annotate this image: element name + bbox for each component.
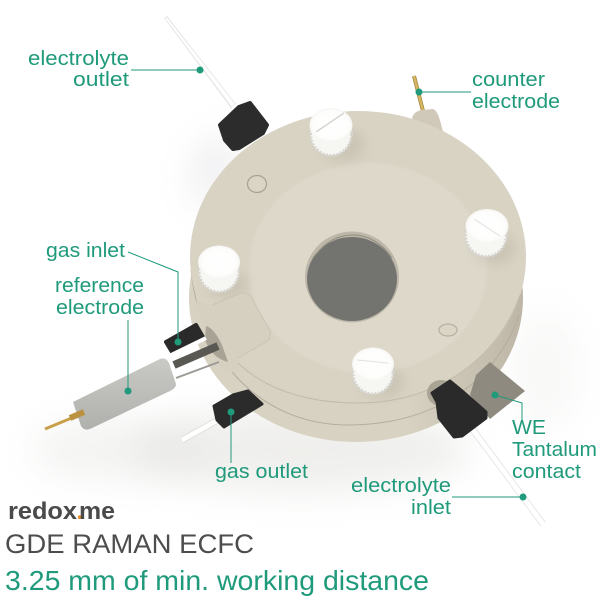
pin recesses xyxy=(248,176,457,336)
label: reference electrode: electrode xyxy=(56,297,144,319)
label: reference electrode xyxy=(55,275,144,319)
gas inlet tubes xyxy=(165,338,219,378)
gas outlet connector xyxy=(214,391,262,427)
label: gas inlet: gas inlet xyxy=(46,240,125,262)
label: electrolyte inlet: electrolyte xyxy=(351,475,451,497)
electrolyte outlet tube xyxy=(164,16,236,108)
leader: electrolyte outlet xyxy=(131,66,204,74)
subtitle: 3.25 mm of min. working distance xyxy=(5,565,429,596)
reference electrode cylinder xyxy=(73,358,176,430)
recess xyxy=(249,163,487,373)
cell body xyxy=(189,111,526,442)
reference electrode pin xyxy=(45,412,84,429)
title: GDE RAMAN ECFC xyxy=(5,529,254,559)
label: electrolyte outlet: outlet xyxy=(73,69,129,91)
electrolyte inlet tube xyxy=(470,426,543,524)
gas outlet tube xyxy=(182,420,218,440)
label: WE Tantalum contact xyxy=(512,417,597,483)
logo: redox.me: redox xyxy=(8,498,78,525)
label: WE Tantalum contact: contact xyxy=(512,461,581,483)
thumb screw: top xyxy=(310,108,352,156)
label: counter electrode: electrode xyxy=(472,91,560,113)
logo: redox.me xyxy=(8,498,115,525)
WE tantalum contact xyxy=(470,362,525,419)
leader: gas inlet xyxy=(128,252,182,346)
electrolyte inlet connector xyxy=(427,380,486,437)
counter electrode xyxy=(412,76,445,138)
thumb screw: bottom xyxy=(352,348,394,394)
logo: redox.me: me xyxy=(79,498,115,525)
label: counter electrode xyxy=(472,69,560,113)
leader: reference electrode xyxy=(124,320,132,394)
label: counter electrode: counter xyxy=(472,69,545,91)
label: electrolyte inlet xyxy=(351,475,451,519)
black connector: electrolyte outlet xyxy=(220,103,267,149)
label: WE Tantalum contact: WE xyxy=(512,417,546,439)
label: WE Tantalum contact: Tantalum xyxy=(512,439,597,461)
leader: WE contact xyxy=(492,392,522,420)
observation window xyxy=(305,232,399,322)
leader: gas outlet xyxy=(228,408,234,463)
label: gas outlet: gas outlet xyxy=(215,461,308,483)
label: reference electrode: reference xyxy=(55,275,144,297)
label: electrolyte outlet: electrolyte xyxy=(28,48,129,70)
background shadows xyxy=(30,130,580,492)
label: electrolyte outlet xyxy=(28,48,129,91)
side port tab xyxy=(196,293,270,372)
leader: counter electrode xyxy=(416,88,471,96)
leader: electrolyte inlet xyxy=(452,494,526,500)
logo: redox.me: . xyxy=(76,498,83,525)
thumb screw: right xyxy=(466,209,508,256)
gas inlet connector xyxy=(166,325,203,352)
thumb screw: left xyxy=(198,246,240,292)
knob shadows xyxy=(208,129,515,398)
label: electrolyte inlet: inlet xyxy=(411,497,451,519)
